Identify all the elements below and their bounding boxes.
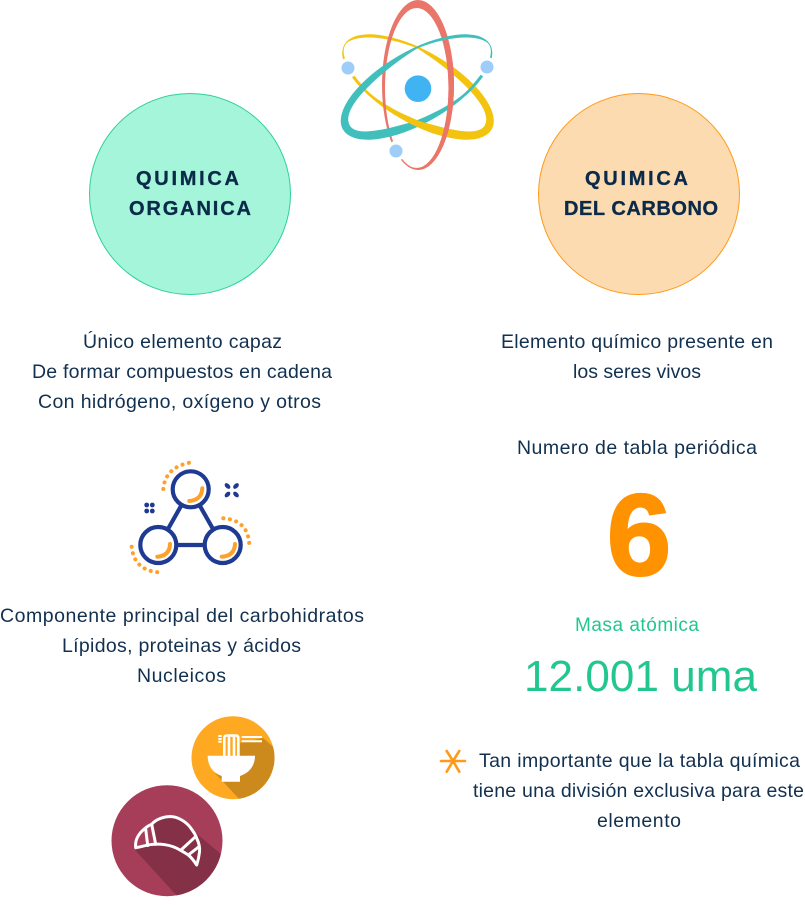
text block: note: tiene una división exclusiva para este [473,780,804,802]
panel: quimica del carbono circle [538,94,740,294]
icon: molecule [132,463,249,572]
icon: asterisk [441,751,465,772]
text block: organic description: De formar compuestos en cadena [32,361,332,383]
number: atomic mass value: 12.001 uma [524,652,758,701]
panel: quimica organica circle: QUIMICA [136,168,239,190]
panel: quimica organica circle: ORGANICA [129,198,251,220]
number: atomic number 6: 6 [607,470,671,600]
text block: organic description [32,330,332,413]
panel: quimica organica circle [90,94,290,294]
text block: organic description: Único elemento capaz [83,330,282,353]
text block: carbon description [501,331,773,383]
icon: croissant [112,785,222,896]
text block: components: Nucleicos [137,665,226,687]
text block: components: Componente principal del carbohidratos [0,605,364,627]
text: atomic mass label: Masa atómica [575,615,699,636]
text: periodic table number label: Numero de tabla periódica [517,437,757,459]
text block: note: Tan importante que la tabla química [479,750,800,772]
text block: organic description: Con hidrógeno, oxígeno y otros [38,391,321,413]
text block: note [473,750,804,832]
icon: noodle bowl [192,716,274,800]
icon: atom [340,0,494,170]
text block: components [0,605,364,687]
text block: carbon description: Elemento químico presente en [501,331,773,353]
text block: components: Lípidos, proteinas y ácidos [62,635,301,657]
text block: carbon description: los seres vivos [573,361,701,383]
panel: quimica del carbono circle: DEL CARBONO [564,198,718,220]
panel: quimica del carbono circle: QUIMICA [585,168,688,190]
text block: note: elemento [597,810,681,832]
